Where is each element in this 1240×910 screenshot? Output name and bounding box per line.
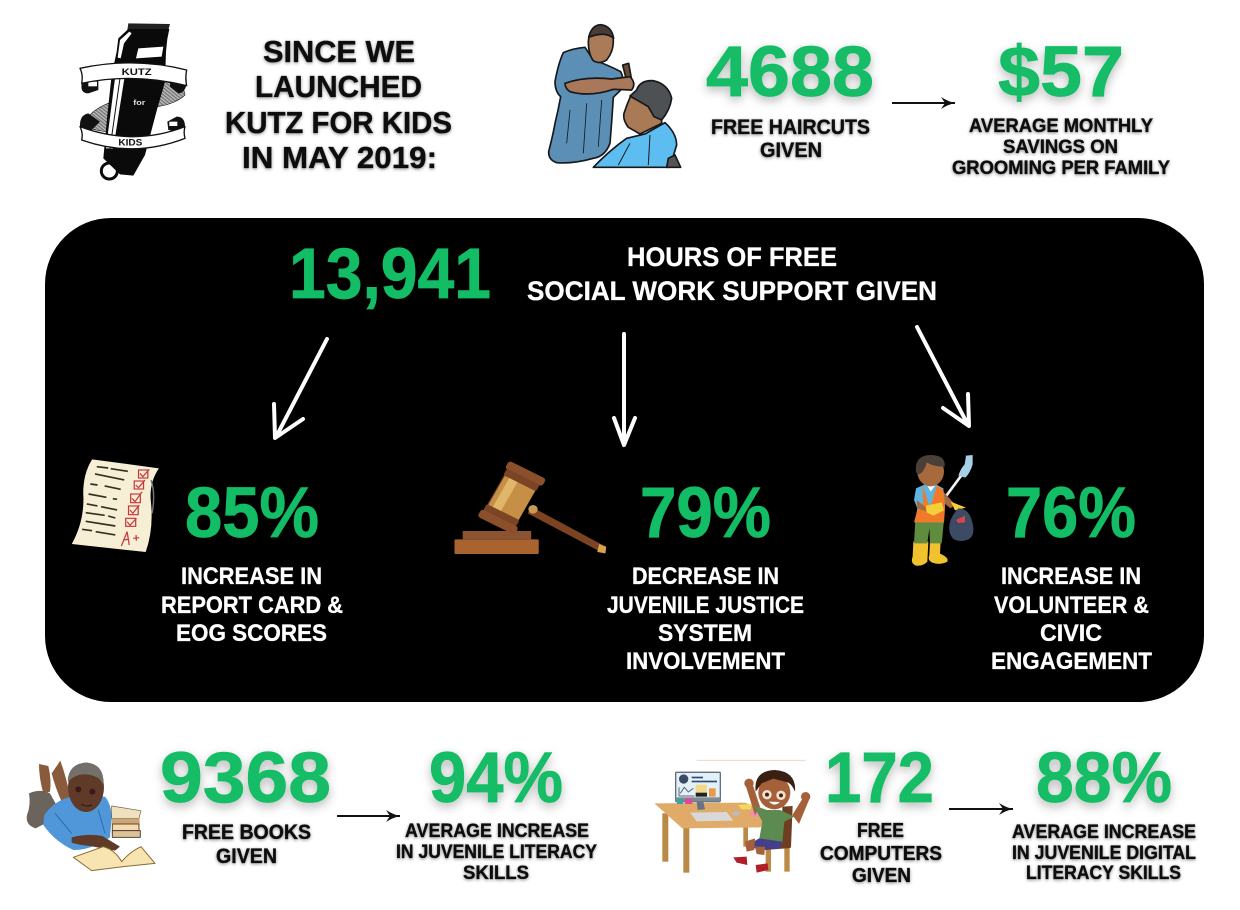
stat: report card increase: INCREASE IN (181, 563, 322, 590)
stat: digital literacy increase: 88% (1036, 739, 1172, 818)
stat: digital literacy increase: LITERACY SKILLS (1026, 863, 1181, 884)
arrow: to justice involvement (614, 334, 635, 445)
stat: juvenile justice decrease: DECREASE IN (632, 563, 779, 590)
stat: juvenile justice decrease: JUVENILE JUSTICE (607, 592, 804, 619)
stat: literacy increase (396, 739, 597, 884)
stat: juvenile justice decrease (607, 474, 804, 675)
stat: juvenile justice decrease: INVOLVEMENT (626, 648, 785, 675)
stat: report card increase: 85% (185, 474, 319, 553)
stat: civic engagement increase: ENGAGEMENT (991, 648, 1152, 675)
stat: free books (160, 739, 331, 868)
icon: child at a computer desk (654, 760, 810, 873)
stat: monthly savings: AVERAGE MONTHLY (969, 116, 1153, 137)
icon: barber cutting a boy's hair (549, 25, 681, 167)
stat: civic engagement increase: CIVIC (1040, 620, 1102, 647)
headline label (527, 242, 937, 306)
stat: free books: FREE BOOKS (182, 821, 311, 844)
icon: Kutz for Kids clipper logo: for (133, 100, 146, 107)
panel: social work support (45, 218, 1204, 702)
stat: free computers: FREE (857, 820, 904, 842)
icon: report card (72, 459, 159, 552)
stat: report card increase (161, 474, 343, 647)
stat: free books: 9368 (160, 739, 331, 818)
headline label: SOCIAL WORK SUPPORT GIVEN (527, 276, 937, 306)
headline number: 13,941 (289, 235, 491, 314)
stat: monthly savings (952, 33, 1170, 179)
stat: digital literacy increase: AVERAGE INCREASE (1012, 822, 1196, 843)
stat: report card increase: REPORT CARD & (161, 592, 343, 619)
stat: monthly savings: SAVINGS ON (1003, 137, 1118, 158)
stat: report card increase: EOG SCORES (176, 620, 327, 647)
stat: literacy increase: AVERAGE INCREASE (405, 821, 589, 842)
icon: Kutz for Kids clipper logo: KUTZ (122, 67, 152, 77)
stat: literacy increase: SKILLS (463, 863, 529, 884)
title: SINCE WE (263, 34, 415, 69)
stat: civic engagement increase: INCREASE IN (1001, 563, 1141, 590)
stat: free computers: GIVEN (852, 865, 911, 887)
arrow: haircuts to savings (892, 102, 955, 104)
icon: boy reading with books (27, 761, 155, 871)
stat: free computers: 172 (825, 739, 934, 818)
title: KUTZ FOR KIDS (225, 105, 452, 140)
stat: juvenile justice decrease: SYSTEM (658, 620, 752, 647)
stat: free computers: COMPUTERS (820, 843, 942, 865)
arrow: books to literacy (337, 815, 400, 817)
stat: free haircuts (706, 33, 874, 162)
icon: Kutz for Kids clipper logo (80, 23, 187, 179)
stat: monthly savings: $57 (998, 33, 1124, 112)
stat: free haircuts: FREE HAIRCUTS (711, 116, 870, 139)
stat: monthly savings: GROOMING PER FAMILY (952, 158, 1170, 179)
arrow: to civic engagement (917, 327, 969, 426)
stat: free computers (820, 739, 942, 887)
arrow: computers to digital literacy (949, 808, 1013, 810)
stat: digital literacy increase: IN JUVENILE DIGITAL (1012, 843, 1196, 864)
icon: gavel (454, 461, 606, 554)
stat: civic engagement increase: VOLUNTEER & (994, 592, 1149, 619)
stat: civic engagement increase (991, 474, 1152, 675)
stat: literacy increase: IN JUVENILE LITERACY (396, 842, 597, 863)
title (225, 34, 452, 175)
arrow: to report card scores (274, 339, 327, 438)
stat: civic engagement increase: 76% (1006, 474, 1136, 553)
stat: digital literacy increase (1012, 739, 1196, 884)
title: LAUNCHED (255, 69, 422, 104)
icon: Kutz for Kids clipper logo: KIDS (118, 138, 142, 148)
title: IN MAY 2019: (242, 140, 437, 175)
stat: free haircuts: GIVEN (760, 139, 822, 162)
stat: juvenile justice decrease: 79% (640, 474, 771, 553)
stat: free books: GIVEN (216, 845, 277, 868)
stat: free haircuts: 4688 (706, 33, 874, 112)
headline label: HOURS OF FREE (627, 242, 837, 272)
stat: literacy increase: 94% (429, 739, 563, 818)
icon: child volunteer picking up litter (912, 455, 973, 566)
